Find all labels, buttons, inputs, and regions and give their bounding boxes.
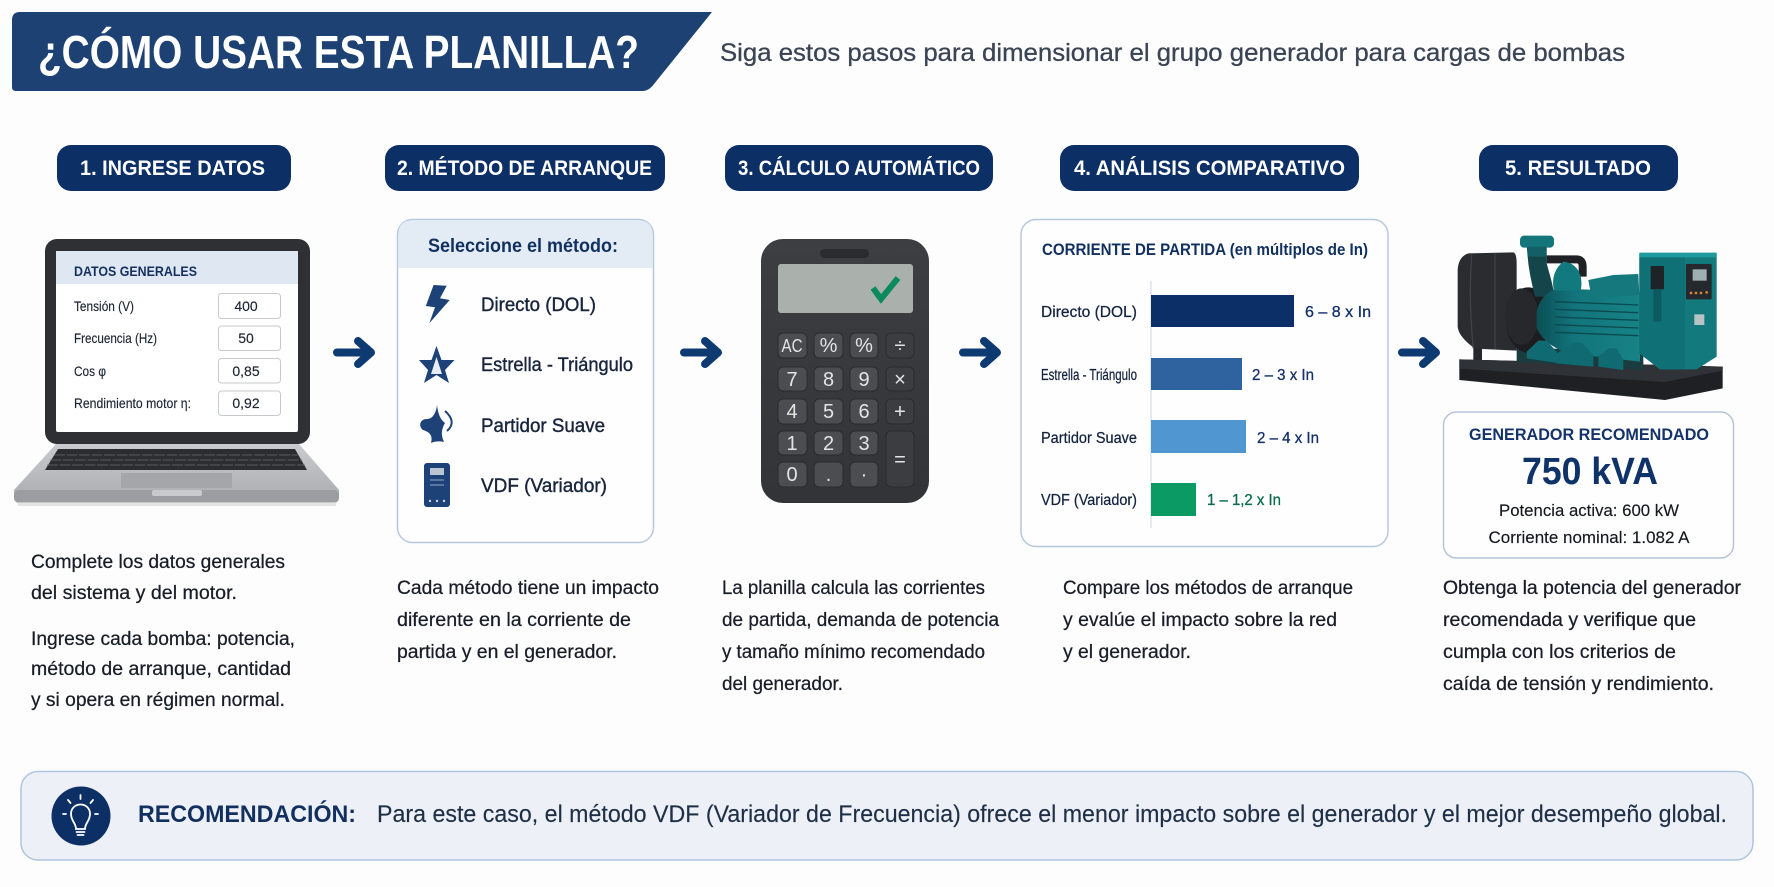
- calculator keys: 6: [858, 401, 870, 423]
- form field: motor efficiency: Rendimiento motor η:: [74, 395, 191, 411]
- step 3 description: La planilla calcula las corrientes: [722, 578, 985, 599]
- form field: motor efficiency: [74, 391, 280, 416]
- calculator keys: AC: [782, 336, 802, 356]
- icon: variable frequency drive: [424, 463, 450, 507]
- step 4 description: y el generador.: [1063, 642, 1191, 663]
- step 1 description: y si opera en régimen normal.: [31, 690, 285, 711]
- form field: power factor: [74, 358, 280, 383]
- panel: recommendation: [21, 772, 1753, 860]
- step 3 heading: [725, 145, 993, 191]
- calculator keys: 3: [858, 433, 870, 455]
- calculator keys: 7: [786, 369, 798, 391]
- icon: soft starter: [420, 405, 452, 443]
- recommendation label: RECOMENDACIÓN:: [138, 800, 356, 828]
- calculator keys: ÷: [895, 335, 906, 357]
- generator set: [1458, 236, 1723, 400]
- icon: lightning bolt: [426, 285, 450, 323]
- bar: soft starter: [1041, 420, 1319, 453]
- step 5 heading: [1479, 145, 1678, 191]
- active power: Potencia activa: 600 kW: [1499, 501, 1679, 520]
- panel: starting current bar chart: [1021, 220, 1388, 546]
- method panel heading: Seleccione el método:: [428, 236, 618, 257]
- calculator keys: %: [820, 335, 838, 357]
- form field: power factor: 0,85: [232, 363, 260, 379]
- title banner: [12, 12, 712, 91]
- arrow 2: [684, 341, 718, 364]
- calculator keys: 1: [786, 433, 798, 455]
- step 4 description: Compare los métodos de arranque: [1063, 578, 1353, 599]
- method: soft starter: Partidor Suave: [481, 415, 605, 437]
- form field: frequency: [74, 326, 280, 350]
- arrow 1: [337, 341, 371, 364]
- form field: tension: [74, 294, 280, 318]
- step 1 description: método de arranque, cantidad: [31, 659, 291, 680]
- step 5 description: caída de tensión y rendimiento.: [1443, 674, 1714, 695]
- step 2 description: [397, 578, 659, 663]
- form heading: DATOS GENERALES: [74, 263, 197, 279]
- step 5 heading: 5. RESULTADO: [1505, 157, 1651, 180]
- step 4 description: y evalúe el impacto sobre la red: [1063, 610, 1337, 631]
- calculator keys: ×: [894, 369, 906, 391]
- step 3 heading: 3. CÁLCULO AUTOMÁTICO: [738, 157, 980, 180]
- recommendation text: Para este caso, el método VDF (Variador de Frecuencia) ofrece el menor impacto sobre el generador y el mejor desempeño global.: [377, 801, 1727, 828]
- calculator keys: 2: [823, 433, 834, 455]
- step 2 description: Cada método tiene un impacto: [397, 578, 659, 599]
- step 5 description: cumpla con los criterios de: [1443, 642, 1676, 663]
- calculator keys: [778, 333, 914, 487]
- calculator keys: .: [826, 464, 831, 486]
- chart title: CORRIENTE DE PARTIDA (en múltiplos de In): [1042, 240, 1368, 259]
- method: direct: Directo (DOL): [481, 294, 596, 316]
- bar: direct: 6 – 8 x In: [1305, 304, 1371, 321]
- bar: star delta: [1041, 358, 1314, 390]
- step 2 heading: 2. MÉTODO DE ARRANQUE: [397, 157, 652, 180]
- icon: check mark: [873, 278, 898, 299]
- calculator keys: ·: [861, 464, 867, 486]
- icon: light bulb: [52, 786, 110, 846]
- step 1 description: Complete los datos generales: [31, 552, 285, 573]
- panel: start method: [398, 220, 654, 542]
- calculator keys: 9: [858, 369, 870, 391]
- result value: 750 kVA: [1522, 451, 1658, 493]
- bar: soft starter: Partidor Suave: [1041, 430, 1137, 447]
- result heading: GENERADOR RECOMENDADO: [1469, 425, 1709, 444]
- calculator keys: 4: [786, 401, 798, 423]
- panel: recommended generator: [1444, 412, 1734, 558]
- method: star delta: Estrella - Triángulo: [481, 354, 633, 376]
- step 1 description: [31, 552, 295, 711]
- title: ¿CÓMO USAR ESTA PLANILLA?: [38, 26, 639, 78]
- bar: star delta: 2 – 3 x In: [1252, 367, 1314, 384]
- step 5 description: [1443, 578, 1742, 695]
- bar: star delta: Estrella - Triángulo: [1041, 367, 1137, 384]
- step 3 description: y tamaño mínimo recomendado: [722, 642, 985, 663]
- bar: VFD: 1 – 1,2 x In: [1207, 492, 1281, 509]
- form field: motor efficiency: 0,92: [232, 395, 260, 411]
- form field: tension: 400: [234, 298, 258, 314]
- bar: VFD: VDF (Variador): [1041, 492, 1137, 509]
- step 3 description: del generador.: [722, 674, 843, 695]
- calculator keys: +: [894, 401, 906, 423]
- bar: direct: Directo (DOL): [1041, 304, 1137, 321]
- calculator keys: 0: [786, 464, 798, 486]
- laptop with general data form: [14, 239, 339, 506]
- form field: frequency: Frecuencia (Hz): [74, 330, 157, 346]
- step 5 description: recomendada y verifique que: [1443, 610, 1696, 631]
- step 2 description: diferente en la corriente de: [397, 610, 631, 631]
- subtitle: Siga estos pasos para dimensionar el grupo generador para cargas de bombas: [720, 39, 1625, 67]
- calculator keys: 8: [823, 369, 834, 391]
- step 4 description: [1063, 578, 1353, 663]
- bar: VFD: [1041, 483, 1281, 516]
- bar: soft starter: 2 – 4 x In: [1257, 430, 1319, 447]
- calculator: [761, 239, 929, 503]
- step 1 description: Ingrese cada bomba: potencia,: [31, 629, 295, 650]
- rated current: Corriente nominal: 1.082 A: [1488, 528, 1690, 547]
- form field: power factor: Cos φ: [74, 363, 106, 379]
- step 4 heading: [1060, 145, 1359, 191]
- step 4 heading: 4. ANÁLISIS COMPARATIVO: [1074, 157, 1345, 180]
- step 2 heading: [385, 145, 665, 191]
- calculator keys: =: [894, 449, 906, 471]
- step 1 heading: [57, 145, 291, 191]
- step 3 description: [722, 578, 999, 695]
- icon: star: [419, 346, 454, 383]
- arrow 3: [963, 341, 997, 364]
- calculator keys: 5: [823, 401, 834, 423]
- arrow 4: [1402, 341, 1436, 364]
- step 5 description: Obtenga la potencia del generador: [1443, 578, 1742, 599]
- bar: direct: [1041, 295, 1371, 327]
- form field: tension: Tensión (V): [74, 298, 134, 314]
- step 1 heading: 1. INGRESE DATOS: [80, 157, 265, 180]
- method: VFD: VDF (Variador): [481, 475, 607, 497]
- step 3 description: de partida, demanda de potencia: [722, 610, 999, 631]
- step 1 description: del sistema y del motor.: [31, 583, 237, 604]
- calculator keys: %: [855, 335, 873, 357]
- step 2 description: partida y en el generador.: [397, 642, 617, 663]
- form field: frequency: 50: [238, 330, 254, 346]
